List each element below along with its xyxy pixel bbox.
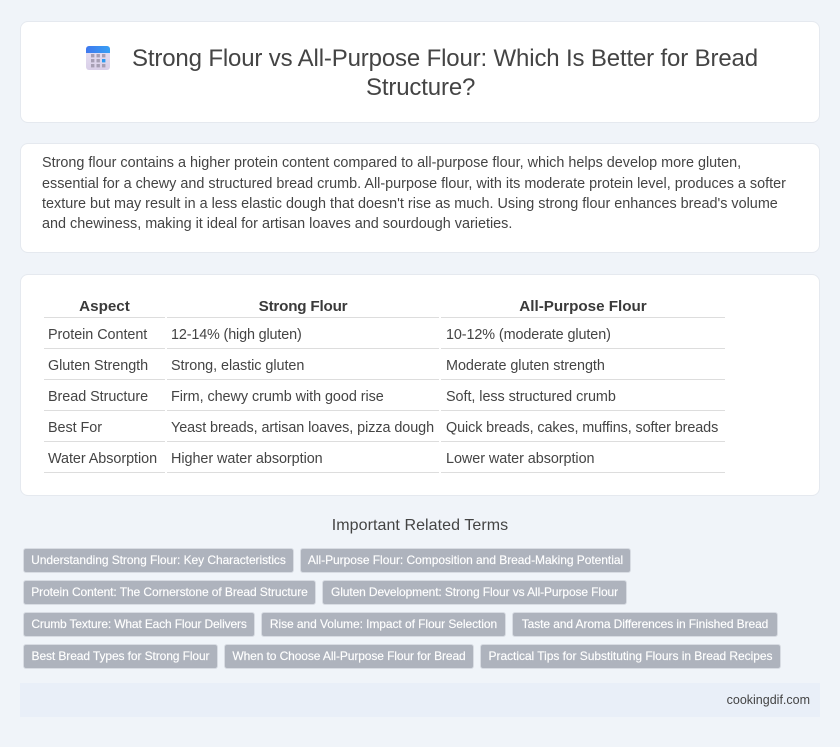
intro text: texture but may result in a less elastic dough that doesn't rise as much. Using strong flour enhances bread's volume [42, 196, 778, 212]
footer [20, 683, 820, 717]
icon: calendar [86, 46, 110, 70]
tag: Best Bread Types for Strong Flour [32, 649, 209, 663]
row: gluten strength [48, 358, 605, 374]
row: bread structure: Bread Structure [48, 389, 148, 405]
tag: Understanding Strong Flour: Key Characteristics [31, 553, 286, 567]
heading: all-purpose flour: All-Purpose Flour [519, 298, 647, 315]
heading: related terms: Important Related Terms [332, 517, 508, 534]
title: Strong Flour vs All-Purpose Flour: Which Is Better for Bread [132, 45, 758, 72]
row: best for [48, 420, 718, 436]
tag [322, 580, 627, 605]
intro text: Strong flour contains a higher protein content compared to all-purpose flour, which helps develop more gluten, [42, 155, 741, 171]
heading: aspect: Aspect [79, 298, 130, 315]
tag: Taste and Aroma Differences in Finished Bread [522, 617, 768, 631]
tag [300, 548, 631, 573]
tag: When to Choose All-Purpose Flour for Bread [232, 649, 466, 663]
tag [23, 612, 255, 637]
row: water absorption [48, 451, 594, 467]
row: bread structure [48, 389, 616, 405]
title: Structure? [366, 74, 475, 101]
row: protein content [48, 327, 611, 343]
row: bread structure: Soft, less structured crumb [446, 389, 616, 405]
tag [261, 612, 506, 637]
tag: Gluten Development: Strong Flour vs All-Purpose Flour [331, 585, 618, 599]
row: best for: Best For [48, 420, 102, 436]
title [132, 45, 758, 101]
panel: header [20, 21, 820, 123]
intro text [42, 155, 786, 232]
panel: comparison table [20, 274, 820, 496]
tag: Protein Content: The Cornerstone of Bread Structure [31, 585, 308, 599]
tag [480, 644, 781, 669]
tag: Rise and Volume: Impact of Flour Selection [270, 617, 497, 631]
row: gluten strength: Moderate gluten strength [446, 358, 605, 374]
tag [23, 548, 294, 573]
row: gluten strength: Gluten Strength [48, 358, 148, 374]
footer source: cookingdif.com [727, 693, 810, 707]
tag [224, 644, 474, 669]
row: gluten strength: Strong, elastic gluten [171, 358, 304, 374]
row: water absorption: Higher water absorption [171, 451, 323, 467]
row: best for: Yeast breads, artisan loaves, pizza dough [171, 420, 434, 436]
row: bread structure: Firm, chewy crumb with good rise [171, 389, 384, 405]
tag: All-Purpose Flour: Composition and Bread-Making Potential [308, 553, 623, 567]
tag list [23, 548, 781, 669]
row: water absorption: Lower water absorption [446, 451, 594, 467]
intro text: and chewiness, making it ideal for artisan loaves and sourdough varieties. [42, 216, 512, 232]
row: protein content: 10-12% (moderate gluten) [446, 327, 611, 343]
tag [512, 612, 778, 637]
row: best for: Quick breads, cakes, muffins, softer breads [446, 420, 718, 436]
tag: Practical Tips for Substituting Flours in Bread Recipes [489, 649, 772, 663]
row: protein content: Protein Content [48, 327, 147, 343]
tag [23, 580, 316, 605]
intro text: essential for a chewy and structured bread crumb. All-purpose flour, with its moderate protein level, produces a softer [42, 176, 786, 192]
tag [23, 644, 218, 669]
row: water absorption: Water Absorption [48, 451, 157, 467]
panel: intro [20, 143, 820, 253]
heading: strong flour: Strong Flour [259, 298, 347, 315]
row: protein content: 12-14% (high gluten) [171, 327, 302, 343]
tag: Crumb Texture: What Each Flour Delivers [31, 617, 247, 631]
